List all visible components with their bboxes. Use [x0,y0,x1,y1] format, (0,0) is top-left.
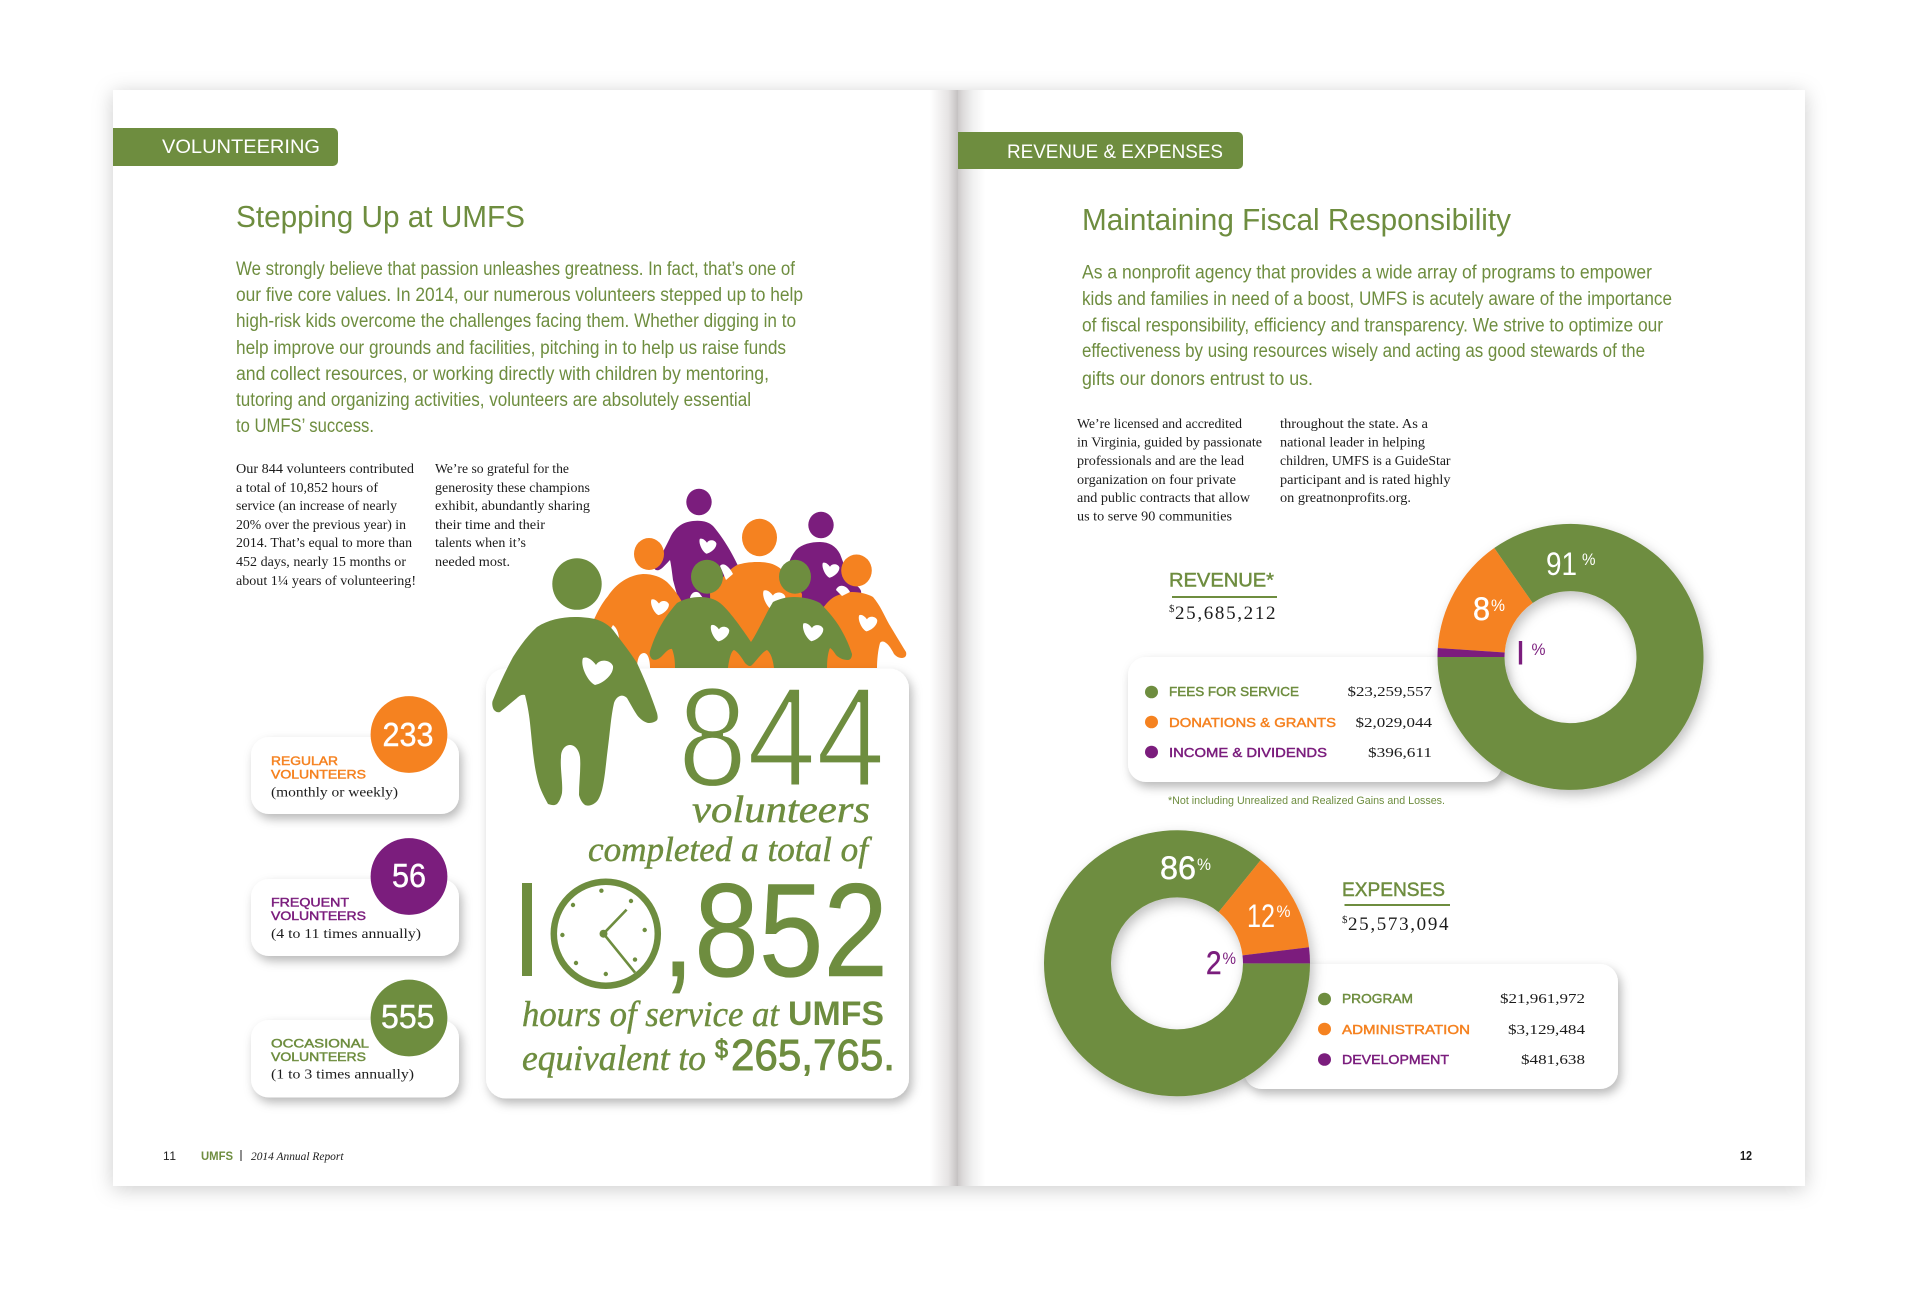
revenue donut chart: % [1532,640,1546,659]
white gaps between limbs [604,564,850,668]
panel: left page volunteering [113,128,909,1163]
body text column 1: service (an increase of nearly [236,498,397,513]
purple figures [654,489,862,620]
expenses legend card: $21,961,972 [1500,992,1585,1007]
body text column 1: professionals and are the lead [1077,453,1244,468]
intro paragraph: high-risk kids overcome the challenges facing them. Whether digging in to [236,311,796,332]
intro paragraph [236,259,803,437]
stat: 10,852 hours with clock [522,878,882,994]
revenue legend card: $23,259,557 [1348,685,1432,700]
footer: left page: 2014 Annual Report [251,1151,344,1163]
intro paragraph: to UMFS’ success. [236,416,374,437]
expenses donut chart: 86 [1160,850,1196,886]
revenue legend card: INCOME & DIVIDENDS [1169,745,1327,760]
panel: right page revenue and expenses [958,132,1752,1163]
expenses donut chart: % [1222,949,1236,968]
body text column 2: throughout the state. As a [1280,416,1428,431]
body text column 2: generosity these champions [435,480,590,495]
body text column 2: on greatnonprofits.org. [1280,490,1411,505]
footer: left page: UMFS [201,1149,233,1163]
heading: maintaining fiscal responsibility: Maintaining Fiscal Responsibility [1082,202,1511,237]
expenses donut chart: 2 [1206,945,1222,981]
stat: hours of service value: $ [715,1034,728,1064]
stat: hours of service value: UMFS [788,995,884,1033]
revenue donut chart [1438,524,1704,790]
expenses donut chart: % [1276,902,1290,921]
body text column 1: organization on four private [1077,472,1236,487]
stat: 10,852 hours with clock: 1 [486,853,562,1006]
stat: hours of service value: 265,765. [731,1031,895,1080]
card: regular volunteers: (monthly or weekly) [271,784,398,800]
body text column 2: talents when it’s [435,535,526,550]
body text column 1 [236,461,416,588]
body text column 2 [1280,416,1451,505]
card: occasional volunteers [251,980,459,1098]
body text column 1: 2014. That’s equal to more than [236,535,412,550]
revenue donut chart: 91 [1546,546,1577,582]
intro paragraph: help improve our grounds and facilities, pitching in to help us raise funds [236,338,786,359]
card: frequent volunteers [251,838,459,956]
stat: 844 volunteers: 844 [678,658,885,817]
body text column 2: needed most. [435,554,510,569]
body text column 1 [1077,416,1262,524]
card: occasional volunteers: OCCASIONAL [271,1036,369,1050]
stat: hours of service value: equivalent to [522,1038,706,1078]
intro paragraph: tutoring and organizing activities, volunteers are absolutely essential [236,390,751,411]
revenue heading and total: 25,685,212 [1175,603,1276,624]
panel: volunteer totals [486,658,909,1098]
card: regular volunteers: 233 [382,716,434,753]
revenue heading and total [1169,570,1277,624]
card: occasional volunteers: (1 to 3 times annually) [271,1066,414,1082]
body text column 2: national leader in helping [1280,434,1425,450]
card: regular volunteers: VOLUNTEERS [271,768,366,782]
body text column 1: us to serve 90 communities [1077,508,1232,524]
illustration: group of volunteers behind the panel [590,489,906,668]
expenses legend card: PROGRAM [1342,991,1413,1006]
intro paragraph: As a nonprofit agency that provides a wide array of programs to empower [1082,262,1653,284]
revenue heading and total: REVENUE* [1169,570,1275,592]
footer: left page: 11 [163,1149,176,1163]
body text column 2: exhibit, abundantly sharing [435,498,590,513]
card: frequent volunteers: FREQUENT [271,896,350,910]
intro paragraph: and collect resources, or working directly with children by mentoring, [236,364,769,385]
revenue donut chart: I [1516,634,1526,672]
expenses heading and total: $ [1342,914,1348,926]
stat: 844 volunteers [588,658,885,869]
expenses donut chart [1044,830,1310,1096]
revenue legend card: $2,029,044 [1356,716,1432,731]
card: frequent volunteers: VOLUNTEERS [271,909,366,923]
expenses legend card: DEVELOPMENT [1342,1052,1449,1067]
orange figures [590,519,906,668]
body text column 1: 20% over the previous year) in [236,517,406,532]
body text column 2: their time and their [435,517,546,532]
revenue legend card [1128,657,1502,782]
expenses donut chart: 12 [1247,898,1275,934]
revenue legend card: $396,611 [1368,746,1432,761]
intro paragraph: kids and families in need of a boost, UMFS is acutely aware of the importance [1082,289,1672,310]
stat: 844 volunteers: completed a total of [588,830,872,869]
body text column 2 [435,461,590,569]
heading: stepping up: Stepping Up at UMFS [236,199,525,234]
icon: clock as zero [554,882,658,986]
stat: hours of service value [522,994,895,1080]
green figures pair [650,560,852,668]
expenses legend card [1244,964,1618,1089]
expenses legend card: ADMINISTRATION [1342,1022,1470,1037]
body text column 1: 452 days, nearly 15 months or [236,554,407,569]
icon: large green volunteer [492,558,658,806]
body text column 1: a total of 10,852 hours of [236,480,379,495]
card: frequent volunteers: (4 to 11 times annually) [271,926,421,941]
card: occasional volunteers: VOLUNTEERS [271,1050,366,1064]
section tab: revenue and expenses: REVENUE & EXPENSES [1007,142,1223,163]
intro paragraph: gifts our donors entrust to us. [1082,369,1313,390]
intro paragraph: of fiscal responsibility, efficiency and transparency. We strive to optimize our [1082,316,1664,336]
revenue heading and total: $ [1169,603,1175,615]
expenses legend card: $3,129,484 [1508,1023,1585,1038]
revenue donut chart: % [1582,550,1596,569]
expenses heading and total: 25,573,094 [1348,914,1449,935]
stat: 844 volunteers: volunteers [692,789,870,831]
body text column 1: about 1¼ years of volunteering! [236,573,416,588]
card: occasional volunteers: 555 [381,998,434,1035]
expenses donut chart: % [1197,855,1211,874]
stat: 10,852 hours with clock: ,852 [662,857,888,1005]
body text column 1: Our 844 volunteers contributed [236,461,414,476]
open brochure spread background [113,90,1805,1186]
section tab: revenue and expenses [958,132,1243,169]
footer: left page [163,1149,344,1163]
body text column 1: in Virginia, guided by passionate [1077,434,1262,450]
section tab: volunteering [113,128,338,166]
intro paragraph: our five core values. In 2014, our numerous volunteers stepped up to help [236,285,803,306]
intro paragraph: We strongly believe that passion unleashes greatness. In fact, that’s one of [236,259,796,280]
section tab: volunteering: VOLUNTEERING [162,137,320,158]
revenue legend card: FEES FOR SERVICE [1169,684,1299,699]
revenue donut chart: % [1491,596,1505,615]
footer: page number 12: 12 [1740,1148,1752,1163]
expenses legend card: $481,638 [1521,1053,1585,1068]
card: regular volunteers: REGULAR [271,754,338,768]
body text column 2: We’re so grateful for the [435,461,569,476]
stat: hours of service value: hours of service at [522,994,780,1034]
body text column 1: We’re licensed and accredited [1077,416,1242,431]
revenue legend card: DONATIONS & GRANTS [1169,715,1336,730]
body text column 1: and public contracts that allow [1077,490,1250,505]
intro paragraph [1082,262,1672,390]
intro paragraph: effectiveness by using resources wisely and acting as good stewards of the [1082,341,1645,362]
body text column 2: children, UMFS is a GuideStar [1280,453,1451,468]
expenses heading and total [1342,880,1450,935]
expenses heading and total: EXPENSES [1342,880,1445,901]
card: frequent volunteers: 56 [392,857,426,894]
revenue donut chart: 8 [1473,591,1490,627]
footnote: *Not including Unrealized and Realized Gains and Losses. [1168,795,1445,807]
card: regular volunteers [251,696,459,814]
body text column 2: participant and is rated highly [1280,472,1451,487]
